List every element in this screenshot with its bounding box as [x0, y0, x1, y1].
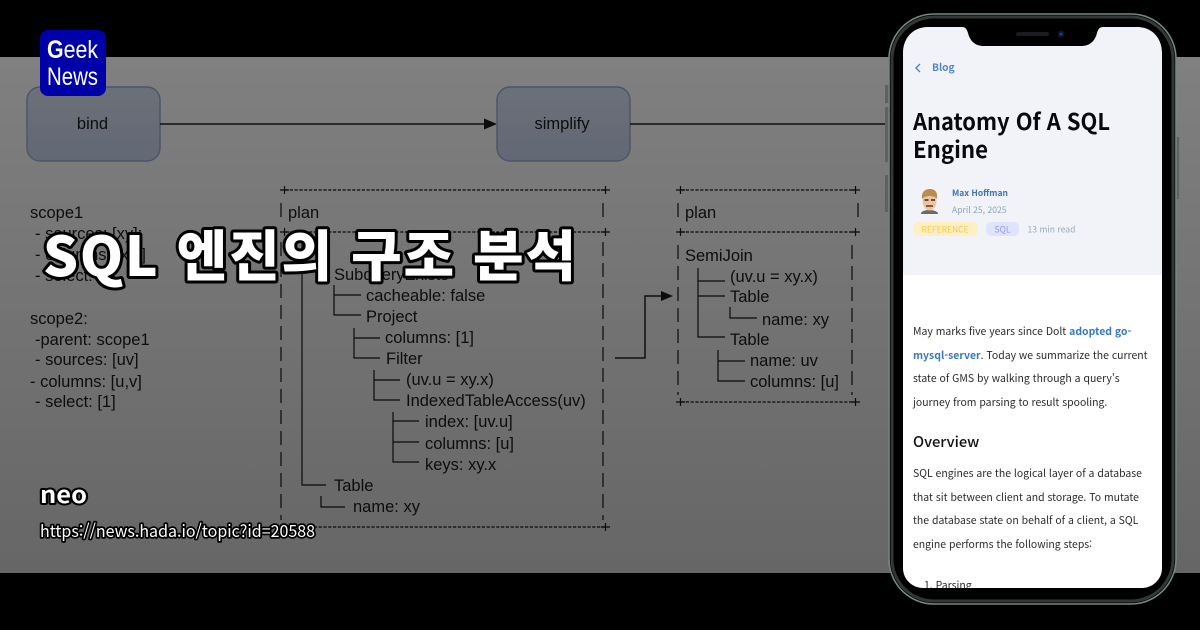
plan box: before simplify: (uv.u = xy.x) — [406, 371, 494, 389]
logo: GeekNews — [40, 30, 106, 96]
tags: 13 min read — [1028, 224, 1075, 236]
overview text: SQL engines are the logical layer of a database — [913, 466, 1142, 481]
article intro: May marks five years since Dolt adopted go- — [913, 324, 1131, 339]
article intro — [912, 324, 1148, 410]
arrow: bind to simplify — [160, 118, 497, 130]
overview text — [913, 466, 1142, 593]
blog back link: Blog — [932, 59, 955, 74]
tags — [913, 222, 1075, 236]
plan box: before simplify: Table — [334, 477, 373, 495]
text block: scopes: - columns: [x,y] — [35, 246, 146, 264]
plan box: before simplify: Project — [366, 308, 418, 326]
text block: scopes — [30, 204, 150, 411]
node: simplify — [497, 87, 630, 161]
node: simplify: simplify — [534, 115, 590, 133]
overview heading: Overview — [913, 431, 979, 452]
text block: scopes: -parent: scope1 — [35, 331, 150, 349]
article intro: journey from parsing to result spooling. — [912, 395, 1107, 410]
article intro: mysql-server. Today we summarize the current — [913, 348, 1148, 363]
plan box: after simplify: Table — [730, 288, 769, 306]
plan box: after simplify — [676, 186, 860, 406]
plan box: before simplify: Filter — [386, 350, 423, 368]
author and date — [952, 189, 1008, 215]
plan box: before simplify — [280, 186, 610, 531]
article title: Anatomy Of A SQL — [912, 103, 1110, 137]
plan box: before simplify: plan — [288, 204, 319, 222]
phone mockup — [885, 14, 1179, 604]
plan box: after simplify: name: xy — [762, 311, 830, 329]
plan box: before simplify: columns: [u] — [425, 435, 514, 453]
node: bind: bind — [77, 115, 108, 133]
plan box: before simplify: cacheable: false — [366, 287, 485, 305]
plan box: before simplify: SubqueryExists — [334, 266, 449, 284]
plan box: before simplify: index: [uv.u] — [425, 413, 513, 431]
diagram — [27, 87, 890, 531]
overview text: the database state on behalf of a client, a SQL — [913, 513, 1139, 528]
text block: scopes: - sources: [xy]: — [35, 225, 142, 243]
overview text: engine performs the following steps: — [913, 537, 1092, 552]
plan box: after simplify: name: uv — [750, 352, 819, 370]
title: SQL 엔진의 구조 분석 — [43, 212, 576, 292]
text block: scopes: - select: [1] — [35, 393, 116, 411]
overview text: 1. Parsing — [924, 578, 972, 593]
arrow: simplify to next stage — [630, 123, 890, 125]
plan box: before simplify: columns: [1] — [385, 329, 474, 347]
author and date: Max Hoffman — [952, 187, 1008, 199]
plan box: before simplify: IndexedTableAccess(uv) — [406, 392, 586, 410]
phone screen — [903, 27, 1162, 593]
plan box: after simplify: columns: [u] — [750, 373, 839, 391]
article title — [912, 111, 1110, 164]
blog back link — [915, 62, 954, 74]
text block: scopes: - columns: [u,v] — [30, 373, 142, 391]
source url: https://news.hada.io/topic?id=20588 — [40, 518, 315, 542]
phone body — [885, 14, 1179, 604]
text block: scopes: scope1 — [30, 204, 83, 222]
avatar — [921, 189, 938, 214]
logo: GeekNews: News — [47, 63, 98, 91]
author: neo — [40, 476, 87, 510]
node: bind — [27, 87, 160, 161]
overview text: that sit between client and storage. To mutate — [913, 490, 1139, 505]
article title: Engine — [913, 131, 988, 165]
plan box: after simplify: (uv.u = xy.x) — [730, 268, 818, 286]
plan box: before simplify: keys: xy.x — [425, 456, 497, 474]
text block: scopes: - select: [1] — [35, 267, 116, 285]
author and date: April 25, 2025 — [952, 204, 1007, 216]
plan box: after simplify: Table — [730, 331, 769, 349]
speaker and camera — [1016, 30, 1064, 38]
plan box: before simplify: name: xy — [353, 498, 421, 516]
tags: SQL — [994, 224, 1011, 236]
text block: scopes: - sources: [uv] — [35, 351, 139, 369]
logo: GeekNews: Geek — [47, 36, 98, 64]
plan box: after simplify: plan — [685, 204, 716, 222]
arrow: plan to simplified plan — [615, 291, 673, 358]
tags: REFERENCE — [922, 224, 969, 236]
article intro: state of GMS by walking through a query's — [913, 371, 1120, 386]
text block: scopes: scope2: — [30, 310, 88, 328]
plan box: after simplify: SemiJoin — [685, 247, 753, 265]
